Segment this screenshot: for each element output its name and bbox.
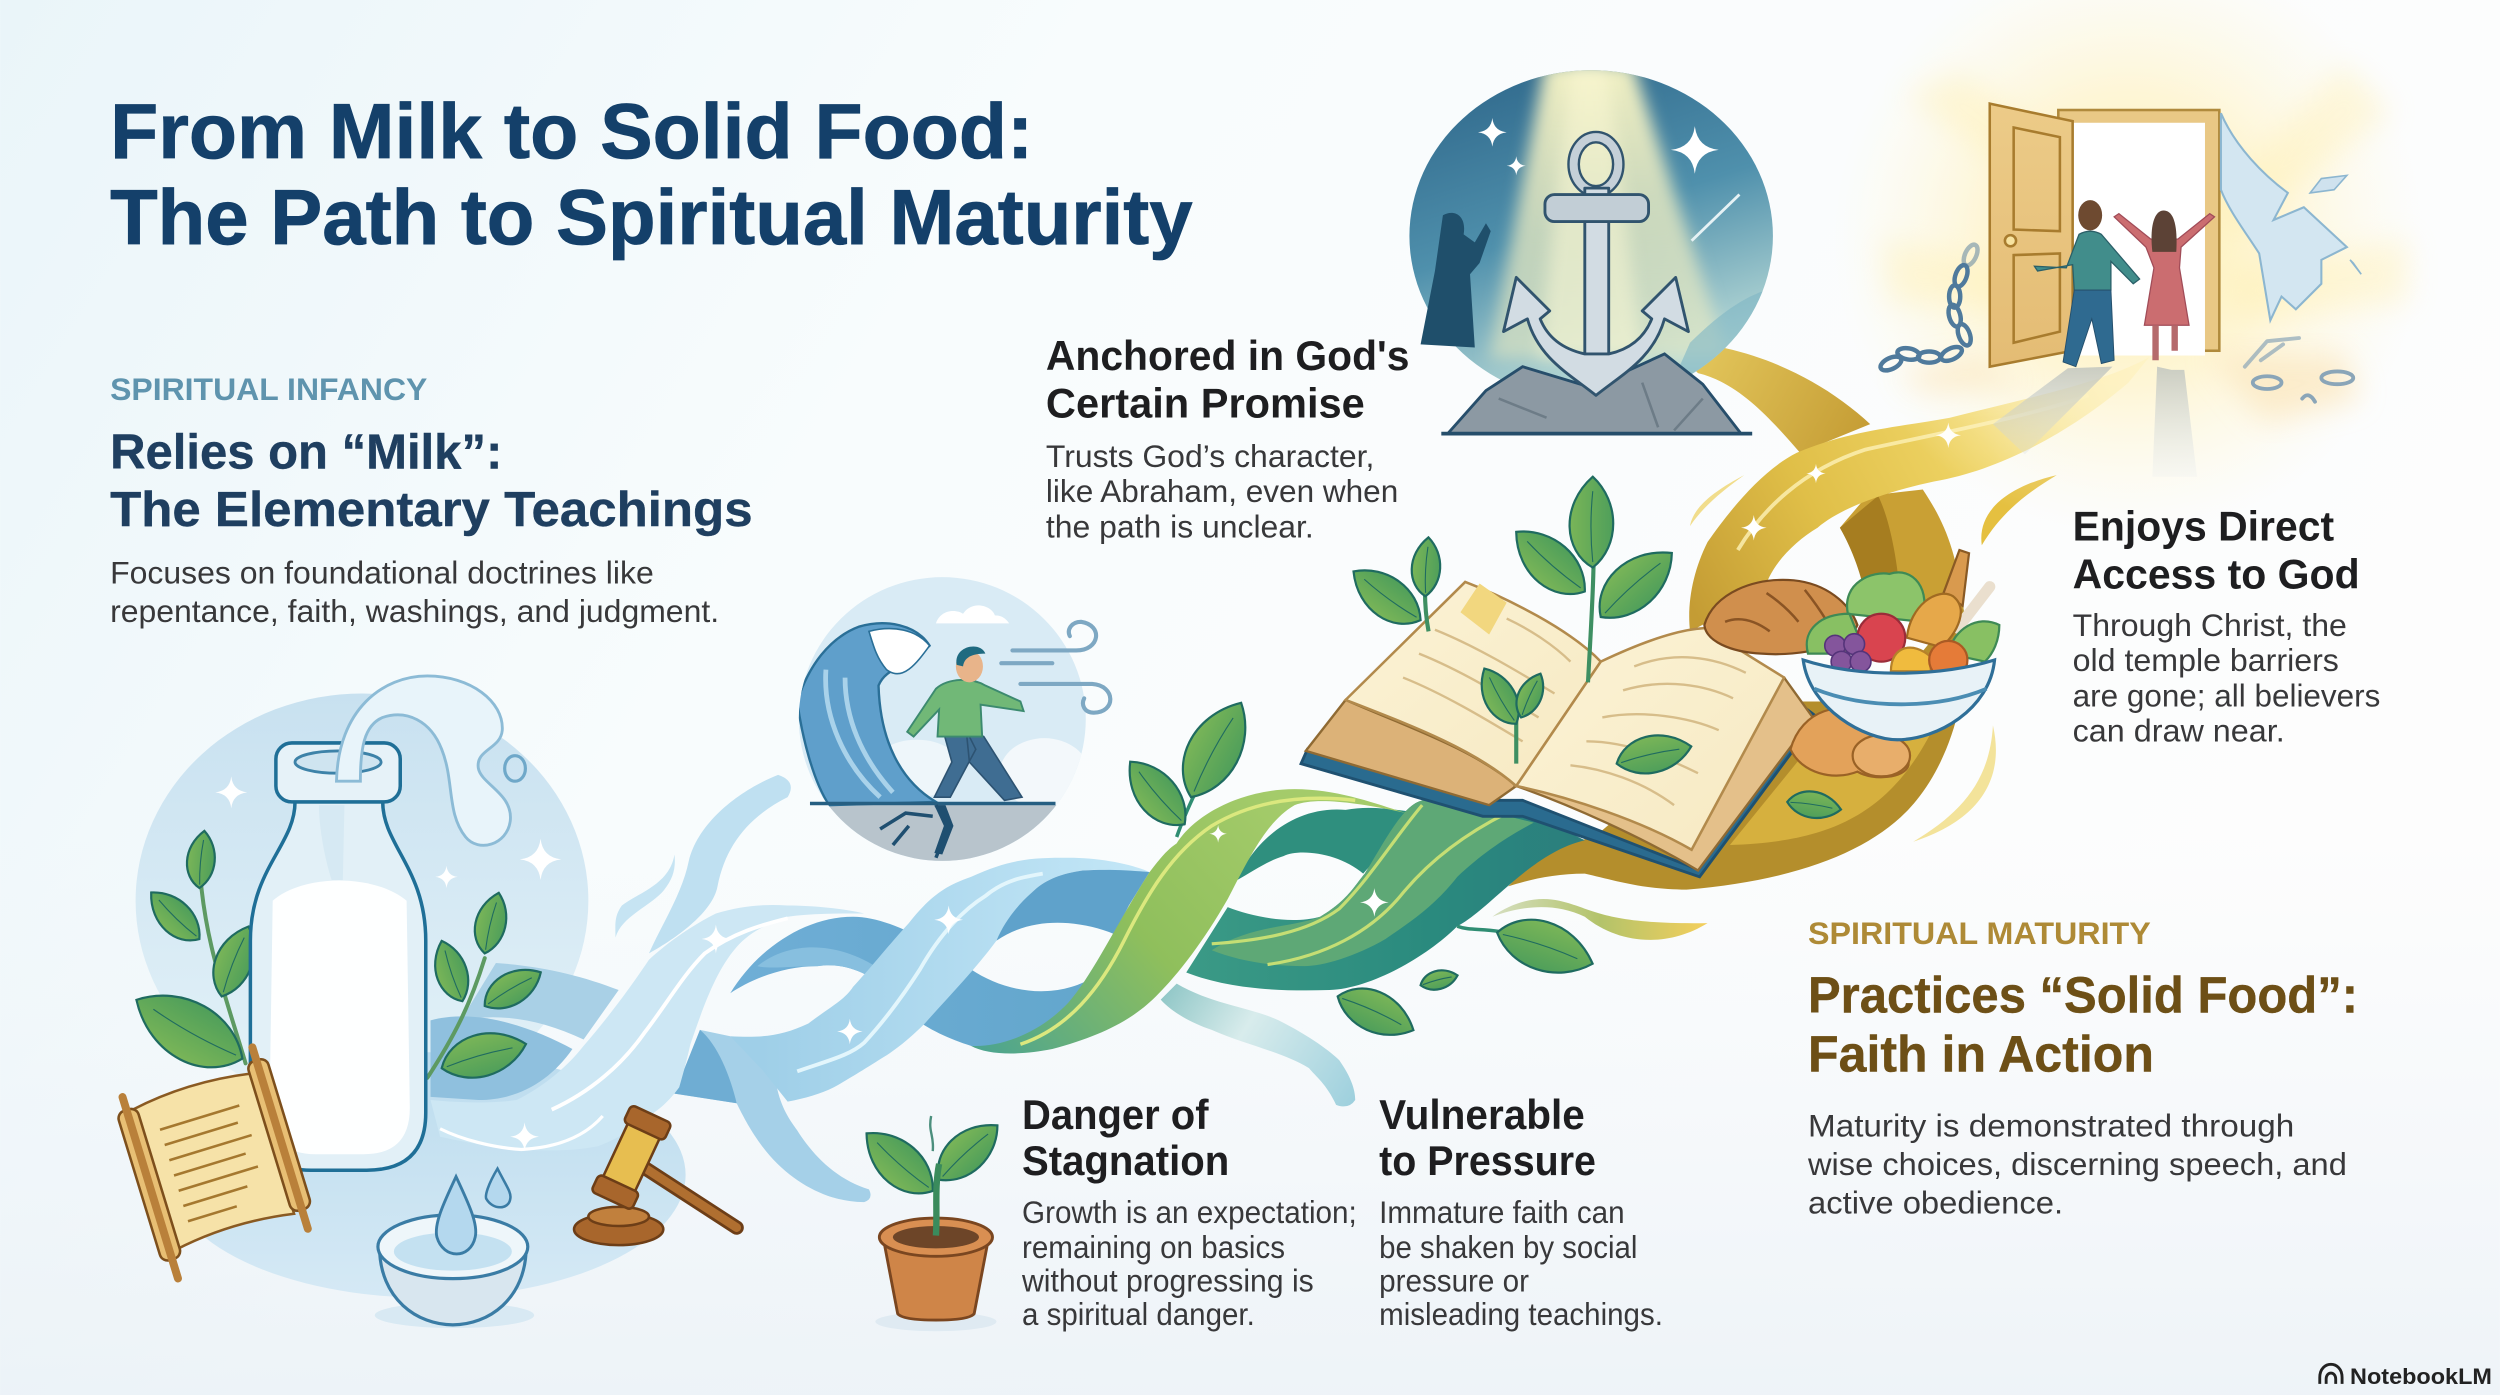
description xyxy=(1807,1109,2347,1220)
description: old temple barriers xyxy=(2073,643,2339,678)
description: are gone; all believers xyxy=(2073,678,2380,713)
gold back loop xyxy=(1666,341,1870,453)
upper wisp xyxy=(649,775,791,953)
description: Growth is an expectation; xyxy=(1022,1195,1357,1230)
heading: relies on milk xyxy=(110,425,753,537)
panel: anchor scene xyxy=(1409,64,1786,434)
icon: person against wave and wind xyxy=(797,577,1110,869)
curtain scraps xyxy=(2310,175,2361,274)
pale green wisp xyxy=(1405,657,1483,797)
icon: milk background circles xyxy=(136,694,686,1298)
label: spiritual maturity: SPIRITUAL MATURITY xyxy=(1808,915,2151,951)
figure: woman xyxy=(2114,210,2215,360)
heading xyxy=(2073,502,2360,597)
description: can draw near. xyxy=(2073,713,2285,748)
figure shadows xyxy=(1993,367,2197,477)
back bands in circle xyxy=(461,963,619,1039)
heading: Stagnation xyxy=(1022,1137,1229,1184)
icon: sprout in pot xyxy=(852,1111,1010,1331)
title: The Path to Spiritual Maturity xyxy=(110,173,1193,261)
heading xyxy=(1379,1091,1596,1184)
icon: solid food bowl xyxy=(1704,550,1999,822)
label: spiritual infancy: SPIRITUAL INFANCY xyxy=(110,371,427,407)
door leaf xyxy=(1990,104,2073,367)
large pale band xyxy=(431,905,864,1150)
title: From Milk to Solid Food: xyxy=(110,87,1033,175)
panel: danger of stagnation text xyxy=(1021,1091,1357,1332)
heading: Certain Promise xyxy=(1046,380,1365,427)
heading: practices solid food: Faith in Action xyxy=(1808,1025,2154,1082)
icon: open book with sprouts xyxy=(1301,477,1818,877)
blue upper right band xyxy=(997,870,1150,941)
description: be shaken by social xyxy=(1379,1230,1637,1265)
floor glow xyxy=(1897,354,2360,422)
panel: vulnerable to pressure text xyxy=(1379,1091,1663,1332)
teal lower band xyxy=(1186,800,1585,990)
description: a spiritual danger. xyxy=(1022,1297,1255,1332)
anchor xyxy=(1503,137,1688,395)
text: infancy description: Focuses on foundational doctrines like xyxy=(110,556,654,591)
watermark: NotebookLM: NotebookLM xyxy=(2350,1364,2492,1389)
panel: gold ribbon xyxy=(1492,341,2149,940)
description: remaining on basics xyxy=(1022,1230,1285,1265)
description: active obedience. xyxy=(1808,1185,2063,1220)
description: Maturity is demonstrated through xyxy=(1808,1109,2294,1144)
panel: direct access text xyxy=(2073,502,2380,748)
description: misleading teachings. xyxy=(1379,1297,1663,1332)
heading: relies on milk: Relies on “Milk”: xyxy=(110,425,502,480)
description: Trusts God’s character, xyxy=(1046,439,1374,474)
heading: Access to God xyxy=(2073,550,2360,597)
description: like Abraham, even when xyxy=(1046,474,1398,509)
description: Through Christ, the xyxy=(2073,608,2347,643)
light rays xyxy=(1881,64,2407,319)
pale tail xyxy=(1161,984,1355,1106)
figure: man xyxy=(2034,200,2140,367)
heading: Enjoys Direct xyxy=(2073,502,2334,549)
chain rubble xyxy=(2245,338,2353,402)
heading: Danger of xyxy=(1022,1091,1209,1138)
description: Immature faith can xyxy=(1379,1195,1625,1230)
description: the path is unclear. xyxy=(1046,509,1314,544)
description: pressure or xyxy=(1379,1263,1529,1298)
description: without progressing is xyxy=(1021,1263,1314,1298)
icon: milk bottle with sprigs xyxy=(121,676,561,1170)
heading: practices solid food: Practices “Solid Food”: xyxy=(1808,966,2358,1023)
icon: gavel xyxy=(574,1105,737,1245)
text: infancy description: repentance, faith, washings, and judgment. xyxy=(110,594,719,629)
description xyxy=(1046,439,1398,544)
teal back band xyxy=(1237,808,1422,880)
lower tail xyxy=(674,1030,871,1202)
light green band xyxy=(971,789,1406,1053)
heading xyxy=(1046,332,1409,427)
panel: anchored in promise text xyxy=(1046,332,1409,544)
heading xyxy=(1022,1091,1229,1184)
heading: practices solid food xyxy=(1808,966,2358,1082)
torn curtain xyxy=(2221,113,2347,320)
text: infancy description xyxy=(110,556,719,629)
panel: flowing green ribbons xyxy=(971,657,1585,1106)
title xyxy=(110,87,1193,261)
gold front band xyxy=(1689,357,2149,631)
description xyxy=(1379,1195,1663,1332)
heading: relies on milk: The Elementary Teachings xyxy=(110,482,753,537)
panel: spiritual infancy text xyxy=(110,371,753,629)
description: wise choices, discerning speech, and xyxy=(1807,1147,2347,1182)
blue twist band xyxy=(730,917,1100,1051)
description xyxy=(2073,608,2380,748)
panel: spiritual maturity text xyxy=(1807,915,2358,1220)
milk stream xyxy=(336,676,510,845)
icon: leaves on green ribbon xyxy=(1114,690,1601,1047)
icon: scroll xyxy=(109,1040,322,1285)
gold base under book xyxy=(1508,603,1966,890)
panel: open door scene xyxy=(1834,0,2423,534)
pale twist band xyxy=(730,858,1150,1102)
mid green stripe band xyxy=(1212,798,1534,966)
panel: flowing blue ribbons xyxy=(431,775,1150,1202)
gold wisps xyxy=(1981,475,2057,545)
description xyxy=(1021,1195,1357,1332)
icon: washing bowl with drops xyxy=(375,1169,534,1328)
broken chain xyxy=(1878,243,1980,373)
heading: to Pressure xyxy=(1379,1137,1596,1184)
heading: Anchored in God's xyxy=(1046,332,1409,379)
heading: Vulnerable xyxy=(1379,1091,1585,1138)
